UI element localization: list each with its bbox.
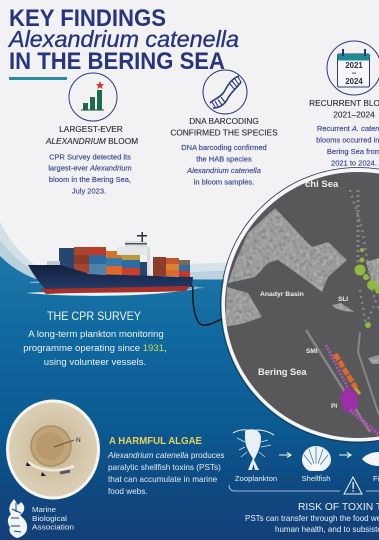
map labels: PI: [331, 403, 337, 410]
text block: 2021 to 2024.: [331, 158, 377, 168]
icon: calendar: [327, 41, 379, 95]
text block: a harmful algae: Alexandrium catenella produces: [107, 451, 225, 460]
logo: Marine Biological Association: Association: [32, 524, 74, 532]
map labels: SLI: [338, 296, 348, 303]
text block: [48, 152, 132, 196]
heading: [45, 124, 138, 146]
text block: largest-ever Alexandrium: [48, 164, 132, 172]
text block: the CPR survey: using volunteer vessels.: [44, 357, 146, 368]
foam: [26, 288, 200, 296]
logo: Marine Biological Association: Marine: [32, 507, 56, 514]
text block: DNA barcoding confirmed: [181, 143, 267, 152]
arrow: [279, 452, 291, 458]
text block: [316, 124, 379, 168]
green bloom stations: [354, 248, 379, 328]
container ship: [26, 232, 205, 296]
heading: DNA BARCODING: [189, 116, 259, 126]
land masses: [225, 208, 379, 364]
text block: a harmful algae: A HARMFUL ALGAE: [109, 436, 202, 447]
ocean background: [0, 256, 379, 540]
text block: CPR Survey detected its: [49, 152, 131, 162]
text block: in bloom samples.: [194, 178, 254, 186]
title: IN THE BERING SEA: [9, 48, 225, 75]
micrograph of Alexandrium catenella: N: [76, 437, 81, 444]
heading: [170, 116, 278, 138]
title: KEY FINDINGS: [9, 5, 166, 32]
text block: the HAB species: [196, 154, 252, 164]
icon: fish: [362, 452, 379, 466]
heading: 2021–2024: [333, 110, 375, 120]
text block: a harmful algae: that can accumulate in marine: [108, 475, 218, 484]
text block: the CPR survey: programme operating since 1931,: [23, 343, 167, 354]
icon: calendar: –: [352, 68, 357, 78]
bridge: [47, 232, 159, 276]
food chain: [233, 429, 379, 483]
panel: recurrent blooms: [309, 41, 379, 168]
text block: a harmful algae: food webs.: [108, 487, 148, 496]
logo: Marine Biological Association: [8, 499, 74, 538]
text block: a harmful algae: paralytic shellfish toxins (PSTs): [108, 463, 221, 472]
text block: the CPR survey: [23, 311, 167, 368]
heading: LARGEST-EVER: [59, 124, 123, 134]
label: Zooplankton: [235, 474, 277, 483]
text block: the CPR survey: THE CPR SURVEY: [47, 311, 141, 323]
icon: DNA helix: [203, 70, 247, 114]
icon: shellfish: [302, 446, 331, 471]
text block: risk of toxin transfer: [245, 502, 379, 534]
map labels: chi Sea: [305, 179, 339, 190]
heading: [309, 98, 379, 120]
map: Bering Sea survey tracks: [220, 168, 379, 442]
title: [7, 5, 239, 80]
arrow: [339, 452, 351, 458]
purple and orange bloom stations: [326, 345, 379, 435]
warning bracket and icon: [229, 477, 379, 494]
icon: bar chart with star: [69, 73, 117, 121]
heading: CONFIRMED THE SPECIES: [170, 128, 278, 138]
logo: Marine Biological Association: Biological: [32, 516, 68, 523]
text block: a harmful algae: [107, 436, 225, 496]
micrograph of Alexandrium catenella: [6, 400, 100, 500]
text block: Alexandrium catenella: [186, 166, 261, 175]
background swoosh: [0, 222, 240, 282]
panel: largest-ever bloom: [45, 73, 138, 196]
hull: [28, 265, 193, 290]
map labels: Bering Sea: [258, 367, 307, 377]
heading: ALEXANDRIUM BLOOM: [45, 136, 138, 146]
icon: calendar: 2024: [345, 77, 363, 86]
label: Shellfish: [301, 474, 331, 483]
containers forward: [59, 247, 150, 276]
panel: DNA barcoding: [170, 70, 278, 186]
title: Alexandrium catenella: [7, 26, 239, 52]
survey tracks: [306, 190, 379, 432]
text block: [181, 143, 267, 186]
containers aft: [153, 257, 190, 277]
text block: the CPR survey: A long-term plankton monitoring: [28, 329, 164, 340]
text block: bloom in the Bering Sea,: [49, 175, 131, 184]
icon: zooplankton: [233, 429, 274, 470]
map labels: Anadyr Basin: [260, 291, 304, 298]
text block: July 2023.: [72, 186, 106, 196]
towed CPR cable: [193, 286, 224, 325]
icon: calendar: 2021: [345, 61, 363, 70]
map labels: [258, 179, 348, 410]
map labels: SMI: [306, 348, 318, 355]
